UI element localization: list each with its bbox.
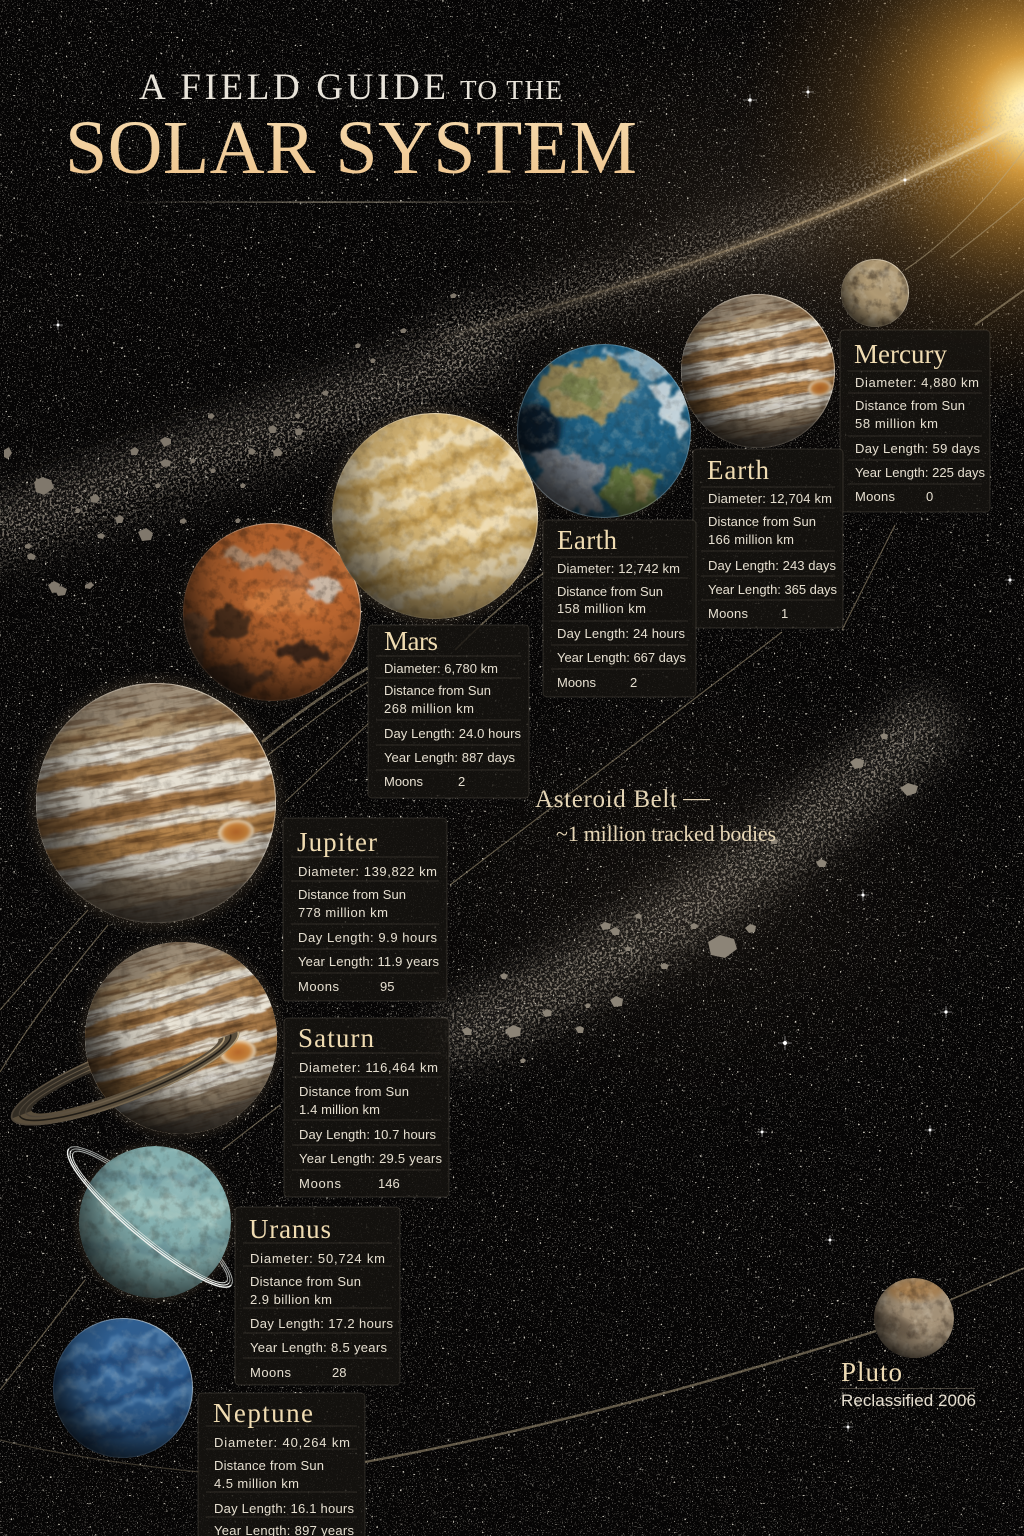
title line 1: A FIELD GUIDE — [139, 67, 446, 108]
icon: planet Neptune — [53, 1318, 193, 1458]
callout: asteroid belt: ~1 million tracked bodies — [556, 821, 776, 846]
Saturn heading: Saturn — [298, 1023, 374, 1053]
Uranus stats: Diameter: 50,724 km — [250, 1251, 385, 1266]
Mercury stats — [855, 375, 986, 504]
icon: planet Venus-like golden world — [325, 406, 545, 625]
title block — [65, 67, 637, 203]
Earth stats: 166 million km — [708, 532, 794, 547]
Mars heading: Mars — [384, 626, 438, 656]
Uranus stats: Day Length: 17.2 hours — [250, 1316, 394, 1331]
Neptune stats: Distance from Sun — [214, 1458, 324, 1473]
Neptune heading: Neptune — [213, 1398, 313, 1428]
callout: asteroid belt — [535, 786, 776, 846]
panel: Jupiter facts — [283, 818, 447, 1001]
icon: planet Mercury — [841, 259, 909, 327]
Earth stats: 2 — [630, 675, 637, 690]
Jupiter stats: Day Length: 9.9 hours — [298, 930, 438, 945]
Earth stats: Year Length: 365 days — [708, 582, 838, 597]
Mars stats: 268 million km — [384, 701, 474, 716]
Mercury stats: Year Length: 225 days — [855, 465, 986, 480]
Mars stats: Year Length: 887 days — [384, 750, 516, 765]
Uranus rear rings — [55, 1132, 245, 1302]
Earth stats: Year Length: 667 days — [557, 650, 686, 665]
Saturn stats: 146 — [378, 1176, 400, 1191]
upper dust band — [0, 112, 1024, 540]
Pluto note: Reclassified 2006 — [841, 1391, 976, 1410]
Mercury stats: 0 — [926, 489, 933, 504]
Mercury stats: Distance from Sun — [855, 398, 965, 413]
Earth heading: Earth — [707, 455, 770, 485]
Jupiter stats: 778 million km — [298, 905, 388, 920]
Saturn stats: Moons — [299, 1176, 342, 1191]
sun glow — [680, 0, 1024, 430]
icon: banded planet labelled Earth — [681, 294, 835, 448]
Jupiter heading: Jupiter — [297, 827, 377, 857]
lower dust band: asteroid belt — [440, 710, 940, 1045]
panel: Saturn facts — [284, 1018, 449, 1197]
panel: Earth facts (second card) — [693, 449, 843, 628]
Jupiter stats: 95 — [380, 979, 394, 994]
Uranus stats: Distance from Sun — [250, 1274, 361, 1289]
Uranus stats — [250, 1251, 394, 1380]
Mars stats: Distance from Sun — [384, 683, 491, 698]
Uranus stats: Year Length: 8.5 years — [250, 1340, 388, 1355]
Jupiter stats: Year Length: 11.9 years — [298, 954, 440, 969]
Earth stats: Day Length: 24 hours — [557, 626, 686, 641]
Uranus heading: Uranus — [249, 1214, 331, 1244]
Mercury stats: Diameter: 4,880 km — [855, 375, 979, 390]
panel: Mercury facts — [840, 330, 990, 512]
Pluto heading: Pluto — [841, 1357, 902, 1387]
Earth stats — [708, 491, 838, 621]
panel: Mars facts — [368, 625, 529, 798]
Saturn rear ring — [1, 1006, 249, 1144]
Saturn front ring — [11, 1031, 249, 1144]
Uranus stats: 2.9 billion km — [250, 1292, 332, 1307]
callout: asteroid belt: Asteroid Belt — [535, 786, 677, 813]
Mars stats: Moons — [384, 774, 424, 789]
title rule — [110, 202, 550, 203]
icon: planet Uranus with rings — [66, 1142, 235, 1302]
Saturn stats: Diameter: 116,464 km — [299, 1060, 438, 1075]
Jupiter stats: Diameter: 139,822 km — [298, 864, 437, 879]
Earth stats: Diameter: 12,704 km — [708, 491, 832, 506]
icon: planet Earth — [516, 342, 692, 520]
Saturn stats — [299, 1060, 442, 1191]
Mercury stats: Day Length: 59 days — [855, 441, 980, 456]
Jupiter stats — [298, 864, 440, 994]
Earth stats: 1 — [781, 606, 788, 621]
Earth stats: Distance from Sun — [708, 514, 816, 529]
Neptune stats — [214, 1435, 354, 1536]
Mercury heading: Mercury — [854, 339, 948, 369]
Jupiter stats: Distance from Sun — [298, 887, 406, 902]
Neptune stats: Diameter: 40,264 km — [214, 1435, 350, 1450]
Saturn stats: Day Length: 10.7 hours — [299, 1127, 436, 1142]
Uranus stats: 28 — [332, 1365, 346, 1380]
Earth stats: Day Length: 243 days — [708, 558, 836, 573]
icon: planet Saturn with rings — [10, 936, 283, 1140]
background: nebula haze — [370, 10, 1024, 1130]
Mercury stats: 58 million km — [855, 416, 938, 431]
asteroids — [4, 293, 918, 1063]
Earth stats — [557, 561, 686, 690]
Neptune stats: Day Length: 16.1 hours — [214, 1501, 354, 1516]
Jupiter stats: Moons — [298, 979, 340, 994]
Earth stats: Moons — [708, 606, 748, 621]
panel: Pluto label — [840, 1357, 976, 1410]
Earth stats: Diameter: 12,742 km — [557, 561, 680, 576]
Mars stats: Day Length: 24.0 hours — [384, 726, 522, 741]
icon: planet Jupiter — [28, 675, 284, 932]
Neptune stats: 4.5 million km — [214, 1476, 299, 1491]
Earth stats: 158 million km — [557, 601, 646, 616]
Mars stats — [384, 661, 522, 789]
Earth stats: Distance from Sun — [557, 584, 663, 599]
Earth heading: Earth — [557, 525, 618, 555]
Mars stats: 2 — [458, 774, 465, 789]
icon: planet Pluto — [868, 1278, 954, 1358]
main title: SOLAR SYSTEM — [65, 106, 637, 190]
Saturn stats: Distance from Sun — [299, 1084, 409, 1099]
panel: Earth facts (first card) — [543, 520, 696, 697]
Saturn stats: Year Length: 29.5 years — [299, 1151, 442, 1166]
icon: planet Mars — [176, 516, 368, 708]
Uranus stats: Moons — [250, 1365, 292, 1380]
Mars stats: Diameter: 6,780 km — [384, 661, 498, 676]
panel: Uranus facts — [235, 1207, 400, 1385]
Earth stats: Moons — [557, 675, 596, 690]
Mercury stats: Moons — [855, 489, 896, 504]
Uranus front rings — [55, 1149, 231, 1302]
Saturn stats: 1.4 million km — [299, 1102, 380, 1117]
panel: Neptune facts — [198, 1393, 365, 1536]
title line 2: TO THE — [460, 75, 562, 105]
